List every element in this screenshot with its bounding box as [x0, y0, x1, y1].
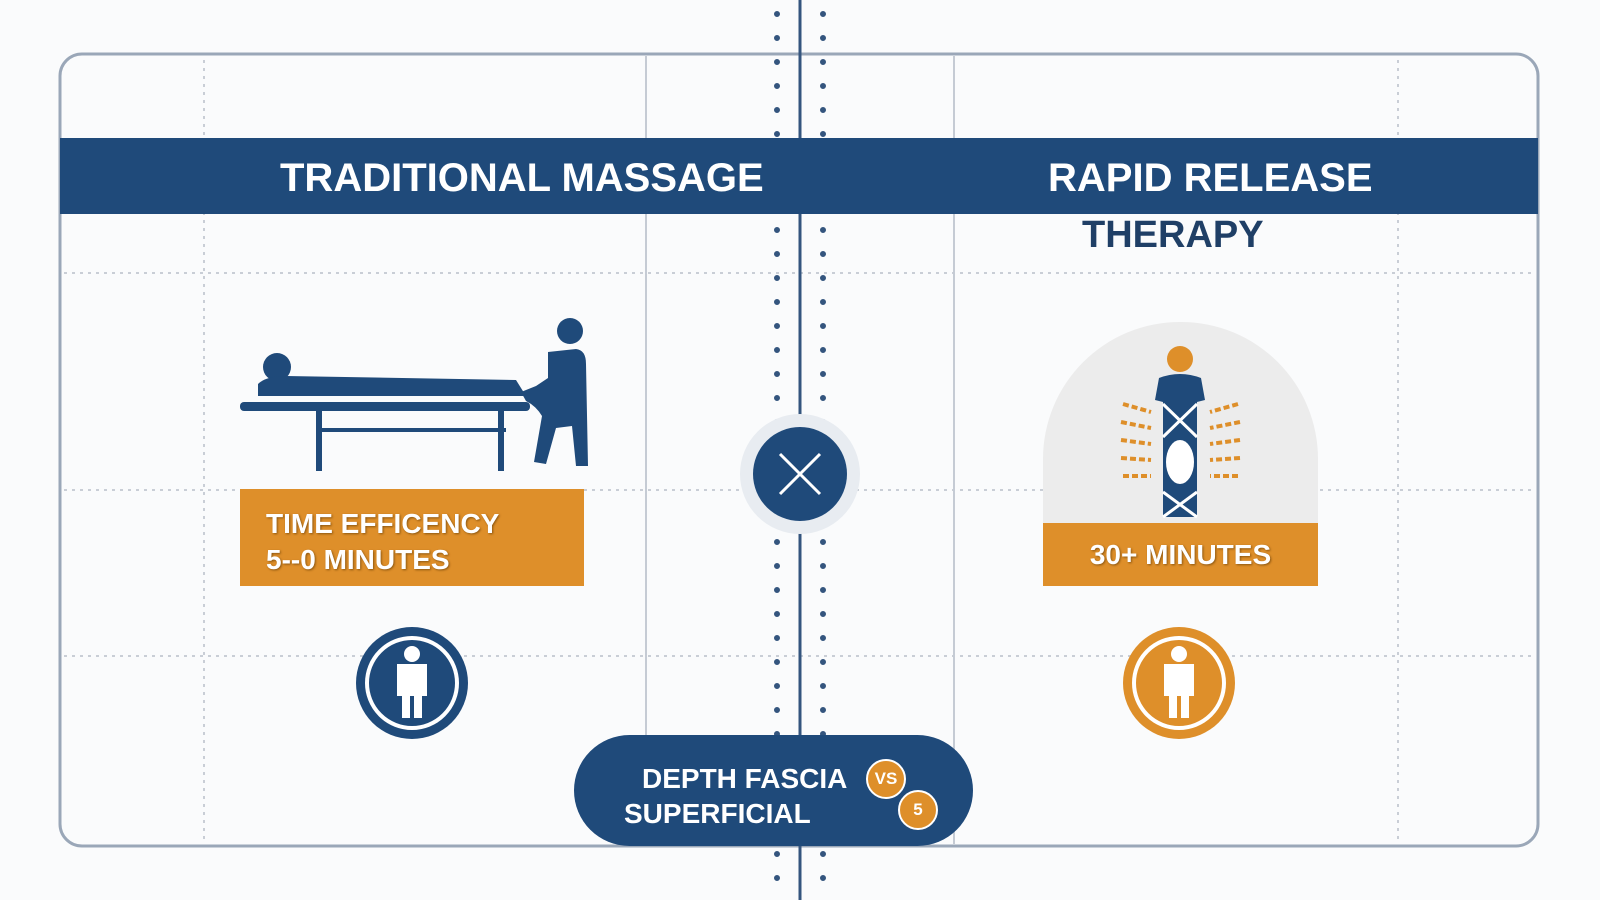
subtitle: therapy: THERAPY [1082, 214, 1264, 256]
callout: 30+ minutes: 30+ MINUTES [1090, 539, 1271, 570]
icon: person navy circle [356, 627, 468, 739]
badge: vs [866, 759, 906, 799]
badge: vs: VS [875, 769, 897, 788]
pill: depth fascia vs superficial [574, 735, 973, 846]
callout: time efficiency: 5--0 MINUTES [266, 544, 450, 575]
icon: wrapped figure [1120, 346, 1240, 518]
callout: 30+ minutes [1043, 523, 1318, 586]
badge: 5: 5 [913, 800, 923, 819]
icon: massage table [240, 318, 588, 471]
title: rapid release: RAPID RELEASE [1048, 156, 1372, 200]
callout: time efficiency [240, 489, 584, 586]
panel: rapid release arch [1043, 322, 1318, 586]
pill: depth fascia vs superficial: DEPTH FASCIA [642, 763, 847, 794]
title: traditional massage: TRADITIONAL MASSAGE [280, 156, 764, 200]
pill: depth fascia vs superficial: SUPERFICIAL [624, 798, 811, 829]
header bar [60, 138, 1538, 214]
icon: person orange circle [1123, 627, 1235, 739]
callout: time efficiency: TIME EFFICENCY [266, 508, 499, 539]
badge: 5 [898, 790, 938, 830]
icon: center X circle [740, 414, 860, 534]
